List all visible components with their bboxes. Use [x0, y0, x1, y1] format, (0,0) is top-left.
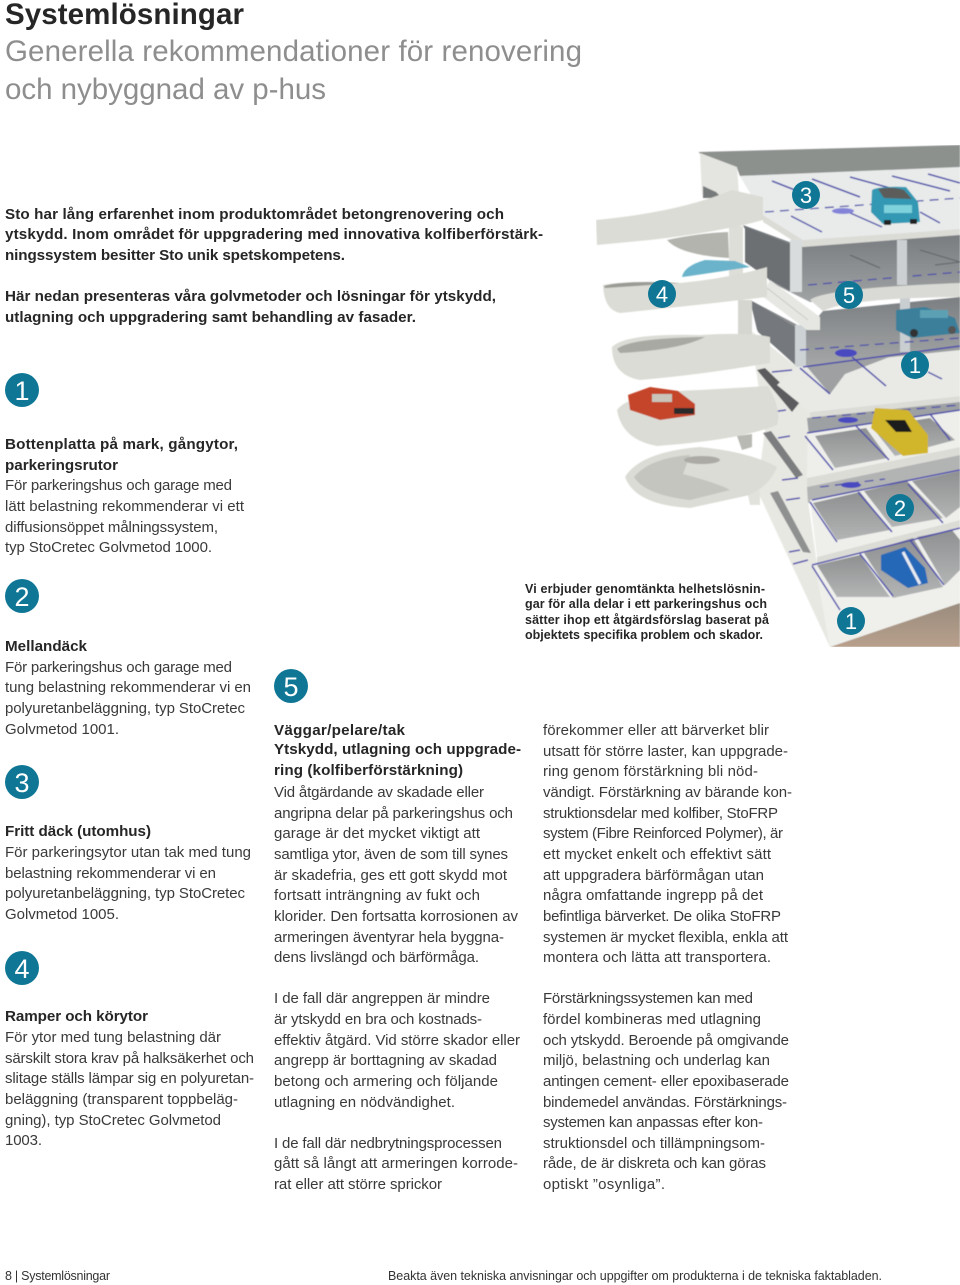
section 4 body: [5, 1029, 254, 1149]
section 5 body paragraph 1: angripna delar på parkeringshus och: [274, 805, 513, 822]
column 3 paragraph 1: befintliga bärverket. De olika StoFRP: [543, 908, 781, 925]
column 3 paragraph 1: utsatt för större laster, kan uppgrade-: [543, 743, 788, 760]
marker 4: 4: [656, 282, 668, 307]
column 3 paragraph 2: bindemedel användas. Förstärknings-: [543, 1094, 787, 1111]
callout: [525, 582, 769, 642]
section 4 body: särskilt stora krav på halksäkerhet och: [5, 1050, 254, 1067]
section 4 body: 1003.: [5, 1132, 42, 1149]
floor surface level 4: [807, 410, 960, 478]
column 3 paragraph 2: optiskt ”osynliga”.: [543, 1176, 665, 1193]
red car ramp: [617, 386, 778, 446]
callout: Vi erbjuder genomtänkta helhetslösnin-: [525, 582, 765, 596]
column 3 paragraph 2: fördel kombineras med utlagning: [543, 1011, 761, 1028]
section 5 body paragraph 1: Vid åtgärdande av skadade eller: [274, 784, 484, 801]
marker 3: [792, 181, 820, 209]
footer page label: 8 | Systemlösningar: [5, 1269, 110, 1283]
section 2 body: polyuretanbeläggning, typ StoCretec: [5, 700, 246, 717]
section 1 heading: [5, 436, 238, 474]
section 4 body: gning), typ StoCretec Golvmetod: [5, 1112, 221, 1129]
marker 2: [886, 494, 914, 522]
badge 1: 1: [14, 376, 30, 406]
intro text: utlagning och uppgradering samt behandling av fasader.: [5, 309, 416, 326]
section 5 body paragraph 2: är ytskydd en bra och kostnads-: [274, 1011, 482, 1028]
section 5 body paragraph 1: är skadefria, ges ett gott skydd mot: [274, 867, 508, 884]
section 2 body: tung belastning rekommenderar vi en: [5, 679, 251, 696]
top deck markings: [772, 174, 960, 232]
section 5 body paragraph 1: samtliga ytor, även de som till synes: [274, 846, 508, 863]
section 1 heading: Bottenplatta på mark, gångytor,: [5, 436, 238, 453]
intro text: Sto har lång erfarenhet inom produktområdet betongrenovering och: [5, 206, 504, 223]
section 5 body paragraph 3: I de fall där nedbrytningsprocessen: [274, 1135, 502, 1152]
level 4 interior: [807, 455, 960, 503]
section 5 body paragraph 3: gått så långt att armeringen korrode-: [274, 1155, 518, 1172]
column 3 text: [543, 722, 792, 1193]
section 2: [5, 579, 251, 738]
marker 1 upper: [901, 351, 929, 379]
icon: car on top deck: [871, 187, 920, 224]
column 3 paragraph 1: struktionsdelar med kolfiber, StoFRP: [543, 805, 778, 822]
column 3 paragraph 1: några omfattande ingrepp på det: [543, 887, 764, 904]
column 3 paragraph 1: att uppgradera bärförmågan utan: [543, 867, 764, 884]
pillar under ramps: [738, 300, 752, 340]
column 3 paragraph 1: systemen är mycket flexibla, enkla att: [543, 929, 789, 946]
icon: red car: [628, 387, 695, 420]
floor surface level 5: [810, 470, 960, 557]
column 3 paragraph 2: [543, 990, 789, 1193]
intro text: ytskydd. Inom området för uppgradering med innovativa kolfiberförstärk-: [5, 226, 543, 243]
section 5 body paragraph 2: I de fall där angreppen är mindre: [274, 990, 490, 1007]
section 5 heading: ring (kolfiberförstärkning): [274, 762, 463, 779]
section 5 heading: [274, 722, 521, 779]
section 3 body: Golvmetod 1005.: [5, 906, 119, 923]
section 5 body paragraph 3: rat eller att större sprickor: [274, 1176, 442, 1193]
column 3 paragraph 2: miljö, belastning och underlag kan: [543, 1052, 770, 1069]
section 5 heading: Ytskydd, utlagning och uppgrade-: [274, 741, 521, 758]
section 4 body: beläggning (transparent toppbeläg-: [5, 1091, 238, 1108]
badge 4: [5, 951, 39, 985]
badge 3: 3: [14, 768, 30, 798]
badge 1: [5, 373, 39, 407]
marker 2: 2: [894, 496, 906, 521]
section 5 body paragraph 2: utlagning en nödvändighet.: [274, 1094, 455, 1111]
column 3 paragraph 2: och ytskydd. Beroende på omgivande: [543, 1032, 789, 1049]
section 1 body: diffusionsöppet målningssystem,: [5, 519, 218, 536]
section 4 body: För ytor med tung belastning där: [5, 1029, 221, 1046]
column 3 paragraph 2: antingen cement- eller epoxibaserade: [543, 1073, 789, 1090]
section 5 body paragraph 1: garage är det mycket viktigt att: [274, 825, 481, 842]
section 5 body paragraph 1: armeringen äventyrar hela byggna-: [274, 929, 504, 946]
intro text: Här nedan presenteras våra golvmetoder och lösningar för ytskydd,: [5, 288, 496, 305]
callout: objektets specifika problem och skador.: [525, 628, 763, 642]
marker 5: 5: [843, 283, 855, 308]
illustration: parking garage cutaway: [596, 145, 960, 647]
badge 2: [5, 579, 39, 613]
badge 5: 5: [283, 672, 299, 702]
column 3 paragraph 1: ring genom förstärkning bli nöd-: [543, 763, 758, 780]
subtitle: och nybyggnad av p-hus: [5, 73, 326, 106]
section 5 heading: Väggar/pelare/tak: [274, 722, 406, 739]
section 5 body paragraph 2: angrepp är borttagning av skadad: [274, 1052, 497, 1069]
marker 5: [835, 281, 863, 309]
floor surface level 3: [777, 350, 960, 412]
marker 4: [648, 280, 676, 308]
section 3 body: För parkeringsytor utan tak med tung: [5, 844, 251, 861]
back column: [729, 226, 743, 290]
floor surface level 6: [815, 527, 960, 647]
section 2 body: Golvmetod 1001.: [5, 721, 119, 738]
marker 3: 3: [800, 183, 812, 208]
section 3: [5, 765, 251, 923]
subtitle: Generella rekommendationer för renovering: [5, 35, 582, 68]
roof back wall: [699, 145, 960, 176]
section 4: [5, 951, 254, 1149]
subtitle: [5, 35, 582, 106]
level 3 interior: [807, 402, 960, 446]
callout: gar för alla delar i ett parkeringshus och: [525, 597, 767, 611]
badge 2: 2: [14, 582, 30, 612]
level 2 floor markings: [800, 338, 960, 350]
section 3 body: [5, 844, 251, 923]
callout: sätter ihop ett åtgärdsförslag baserat på: [525, 613, 769, 627]
marker 1 lower: [837, 607, 865, 635]
section 4 body: slitage ställs lämpar sig en polyuretan-: [5, 1070, 254, 1087]
footer note: Beakta även tekniska anvisningar och uppgifter om produkterna i de tekniska faktabladen.: [388, 1269, 882, 1283]
lower spiral ramp: [625, 447, 777, 508]
section 5 body paragraph 3: [274, 1135, 518, 1193]
section 2 body: [5, 659, 251, 738]
badge 4: 4: [14, 954, 30, 984]
ramp 3: [612, 334, 770, 380]
column 3 paragraph 2: Förstärkningssystemen kan med: [543, 990, 753, 1007]
cars: [628, 187, 960, 588]
section 1 body: lätt belastning rekommenderar vi ett: [5, 498, 245, 515]
section 5 body paragraph 1: fortsatt inträngning av fukt och: [274, 887, 480, 904]
column 3 paragraph 1: system (Fibre Reinforced Polymer), är: [543, 825, 783, 842]
column 3 paragraph 1: [543, 722, 792, 966]
section 3 body: polyuretanbeläggning, typ StoCretec: [5, 885, 246, 902]
section 1 heading: parkeringsrutor: [5, 457, 118, 474]
section 2 heading: Mellandäck: [5, 638, 88, 655]
ground: [830, 603, 960, 647]
column 3 paragraph 1: förekommer eller att bärverket blir: [543, 722, 769, 739]
column 3 paragraph 1: vändigt. Förstärkning av bärande kon-: [543, 784, 792, 801]
section 3 heading: Fritt däck (utomhus): [5, 823, 151, 840]
section 3 body: belastning rekommenderar vi en: [5, 865, 216, 882]
section 1 body: [5, 477, 245, 556]
badge 3: [5, 765, 39, 799]
section 1 body: typ StoCretec Golvmetod 1000.: [5, 539, 212, 556]
level 2 slab and curved ramp: [810, 283, 960, 311]
column 3 paragraph 1: ett mycket enkelt och effektivt sätt: [543, 846, 772, 863]
section 5 body paragraph 1: klorider. Den fortsatta korrosionen av: [274, 908, 518, 925]
icon: yellow car: [871, 408, 928, 456]
interior level 1: [743, 225, 960, 302]
section 1 body: För parkeringshus och garage med: [5, 477, 232, 494]
column 3 paragraph 1: montera och lätta att transportera.: [543, 949, 771, 966]
section 5 body paragraph 1: dens livslängd och bärförmåga.: [274, 949, 479, 966]
section 5 body paragraph 2: effektiv åtgärd. Vid större skador eller: [274, 1032, 520, 1049]
intro text: ningssystem besitter Sto unik spetskompetens.: [5, 247, 345, 264]
badge 5: [274, 669, 308, 703]
side band with dark strips: [750, 330, 830, 647]
marker 1 lower: 1: [845, 609, 857, 634]
corner wall: [700, 153, 739, 195]
top deck: [740, 167, 960, 240]
section 5: [274, 669, 521, 1193]
interior level 2: [750, 297, 960, 367]
icon: car on ramp 4: [682, 260, 750, 277]
column 3 paragraph 2: struktionsdel och tillämpningsom-: [543, 1135, 765, 1152]
marker 1 upper: 1: [909, 353, 921, 378]
ramp 4: [603, 267, 767, 313]
column 3 paragraph 2: råde, de är diskreta och kan göras: [543, 1155, 766, 1172]
column 3 paragraph 2: systemen kan anpassas efter kon-: [543, 1114, 763, 1131]
section 5 body paragraph 1: [274, 784, 518, 966]
section 5 body paragraph 2: betong och armering och följande: [274, 1073, 498, 1090]
icon: blue sports car: [881, 547, 928, 588]
ramp top: [596, 190, 763, 245]
icon: car on level 2: [896, 307, 960, 338]
section 1: [5, 373, 245, 556]
section 2 body: För parkeringshus och garage med: [5, 659, 232, 676]
section 5 body paragraph 2: [274, 990, 520, 1111]
columns: [790, 240, 802, 292]
section 4 heading: Ramper och körytor: [5, 1008, 148, 1025]
intro text: [5, 206, 543, 326]
